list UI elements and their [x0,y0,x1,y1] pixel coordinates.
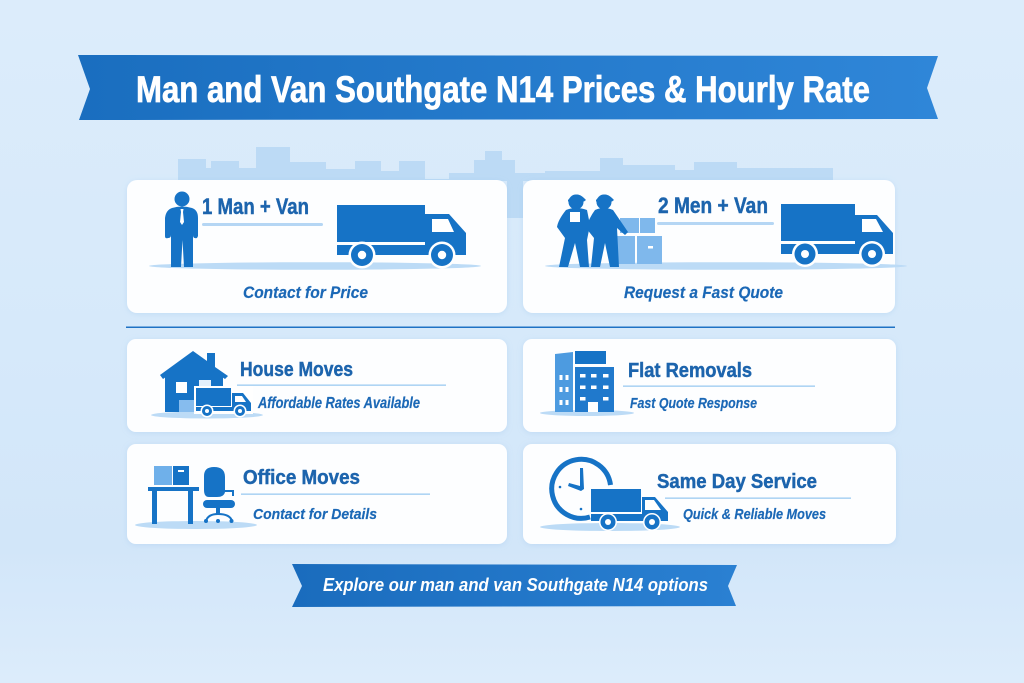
icon: truck [337,205,466,268]
heading underline [657,222,774,225]
icon: apartment building [555,351,614,412]
heading: Same Day Service [657,471,817,493]
price note: Contact for Price [243,283,368,302]
heading: 2 Men + Van [658,193,768,218]
heading underline [202,223,323,226]
heading underline [241,494,430,495]
ground shadow [545,262,907,270]
icon: house with van [160,351,253,418]
icon: clock and van [552,459,668,531]
title text: Man and Van Southgate N14 Prices & Hourly Rate [136,69,870,110]
ground shadow [149,262,481,270]
footer text: Explore our man and van Southgate N14 options [323,575,708,595]
title banner [78,55,938,120]
quote note: Request a Fast Quote [624,283,783,302]
ground shadow [540,523,680,531]
panel: flat removals [523,339,896,432]
description: Contact for Details [253,506,377,523]
panel: office moves [127,444,507,544]
heading: Office Moves [243,467,360,489]
ground shadow [135,521,257,529]
icon: truck [781,204,893,267]
panel: house moves [127,339,507,432]
heading underline [623,386,815,387]
icon: desk and chair [148,466,235,524]
heading: House Moves [240,359,353,381]
panel: 1 man + van [127,180,507,313]
ground shadow [540,410,634,416]
icon: boxes [614,218,662,264]
heading: 1 Man + Van [202,194,309,219]
description: Fast Quote Response [630,396,757,412]
panel: 2 men + van [523,180,907,313]
ground shadow [151,412,263,418]
description: Quick & Reliable Moves [683,506,826,523]
footer banner [292,564,737,607]
heading: Flat Removals [628,360,752,382]
description: Affordable Rates Available [257,395,420,412]
icon: two movers [557,194,628,267]
panel: same day service [523,444,896,544]
heading underline [665,498,851,499]
heading underline [237,384,446,386]
icon: man in suit [165,192,198,267]
skyline silhouette [178,147,833,218]
